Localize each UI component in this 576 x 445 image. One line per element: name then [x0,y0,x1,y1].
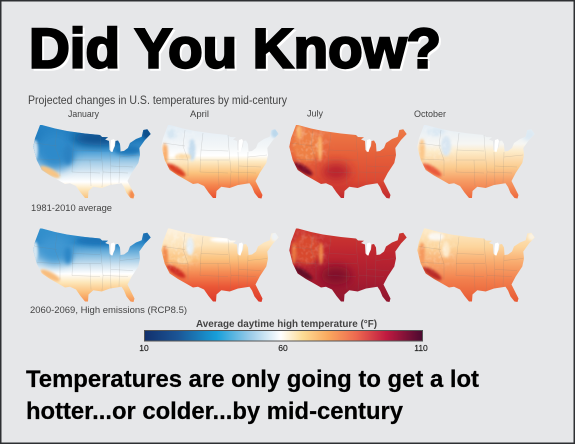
map: January 1981-2010 [33,125,151,198]
takeaway text [26,366,479,425]
chart heading: Projected changes in U.S. temperatures by mid-century [28,93,287,107]
column label: October: October [414,109,446,120]
map: April 2060-2069 [161,228,278,302]
row label: 1981-2010 average: 1981-2010 average [31,203,112,214]
column label: July: July [307,108,323,120]
map: October 1981-2010 [418,125,534,198]
legend tick: 110: 110 [414,343,428,353]
map: April 1981-2010 [162,125,278,198]
map: October 2060-2069 [417,228,534,302]
legend tick: 10: 10 [139,343,149,353]
title: Did You Know? [29,16,441,80]
legend title: Average daytime high temperature (°F) [196,319,377,330]
column label: April: April [190,109,209,120]
column label: January: January [68,109,99,120]
legend tick: 60: 60 [278,343,288,353]
takeaway line two: hotter...or colder...by mid-century [26,398,403,425]
map: July 2060-2069 [289,228,407,302]
map: July 1981-2010 [289,125,407,198]
colour legend [139,319,428,353]
takeaway line one: Temperatures are only going to get a lot [26,366,479,393]
legend colour bar [144,330,422,341]
row label: 2060-2069 high emissions: 2060-2069, High emissions (RCP8.5) [30,305,187,316]
map: January 2060-2069 [33,228,151,302]
